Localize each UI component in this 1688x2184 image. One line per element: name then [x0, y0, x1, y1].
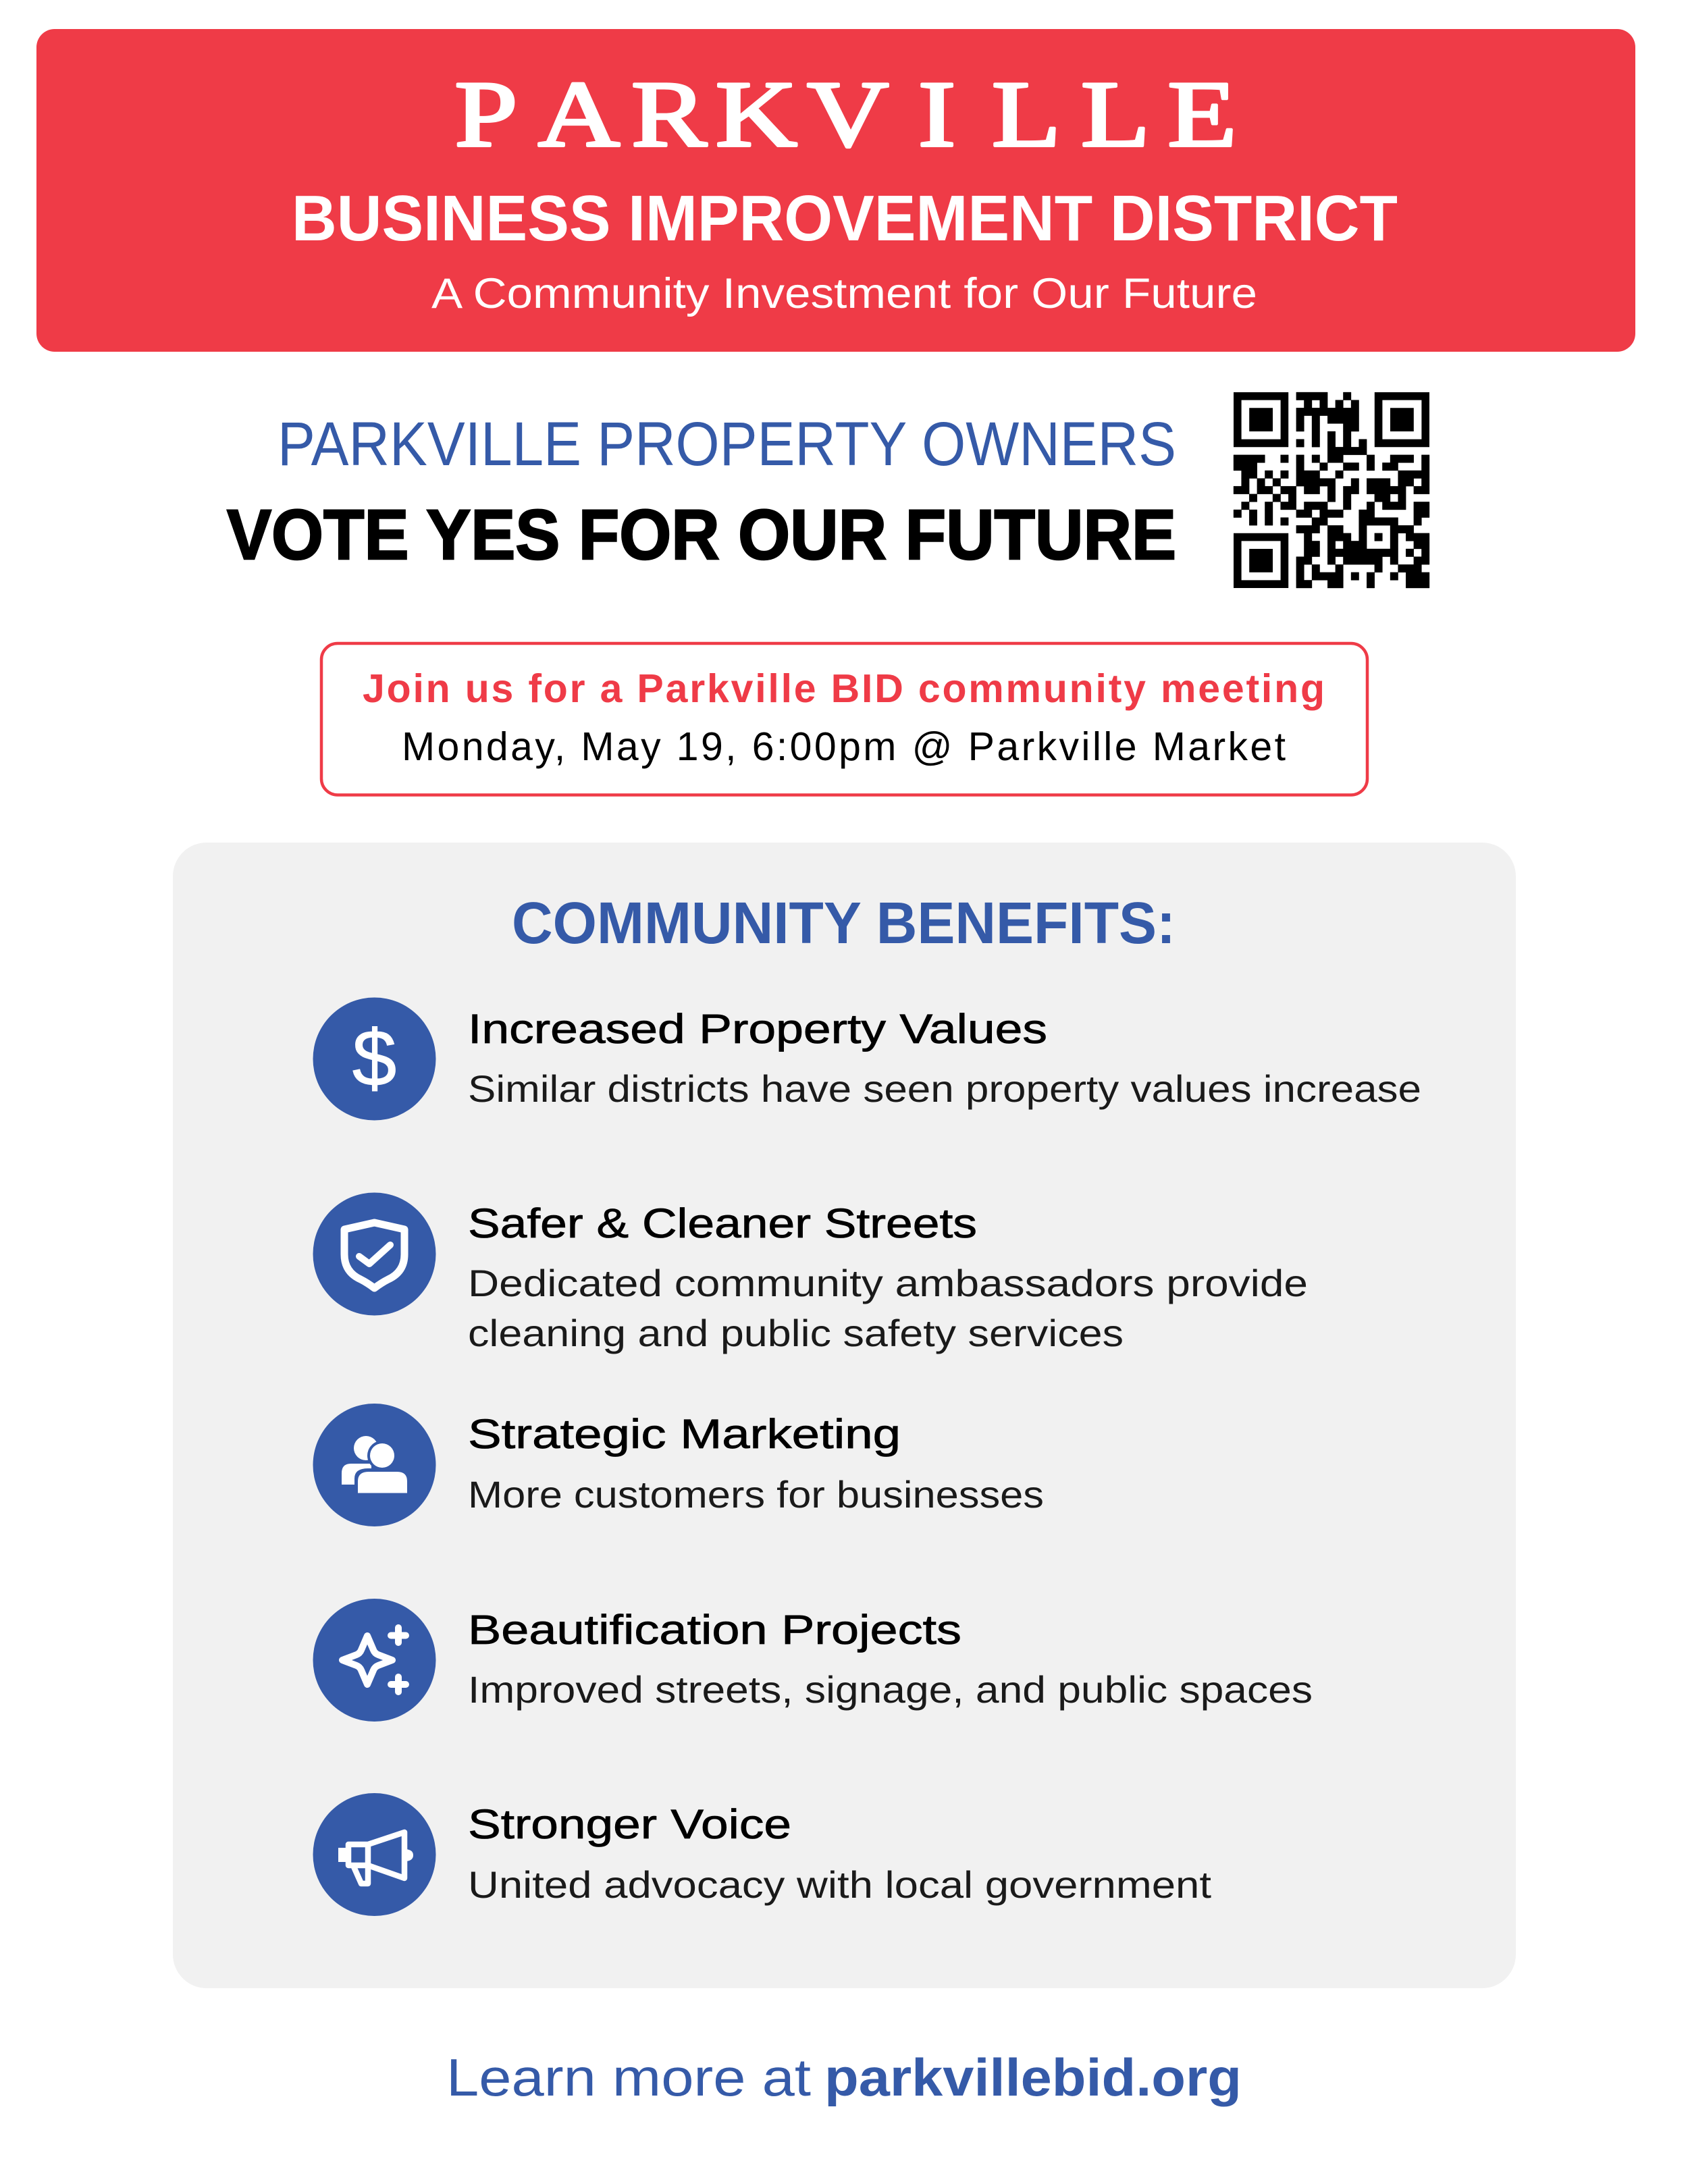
meeting date and place: Monday, May 19, 6:00pm @ Parkville Market — [402, 724, 1286, 769]
icon: dollar sign — [313, 998, 436, 1121]
QR code — [1234, 392, 1429, 588]
footer link — [446, 2048, 1242, 2107]
icon: dollar sign: $ — [352, 1014, 396, 1103]
benefit: safer streets — [313, 1192, 1308, 1354]
benefit: property values — [313, 998, 1421, 1121]
tagline: A Community Investment for Our Future — [431, 270, 1257, 317]
call to action headings — [227, 410, 1176, 575]
benefit: marketing — [313, 1404, 1044, 1526]
benefit description — [468, 1262, 1308, 1354]
benefit description: Improved streets, signage, and public spaces — [468, 1668, 1313, 1711]
footer link: Learn more at — [446, 2048, 811, 2107]
heading: community benefits: COMMUNITY BENEFITS: — [512, 890, 1176, 956]
heading: Business Improvement District: BUSINESS IMPROVEMENT DISTRICT — [292, 182, 1398, 255]
heading: vote yes: VOTE YES FOR OUR FUTURE — [227, 496, 1176, 575]
benefit description: More customers for businesses — [468, 1473, 1044, 1516]
benefit description: Similar districts have seen property values increase — [468, 1067, 1421, 1110]
benefit description: United advocacy with local government — [468, 1863, 1211, 1906]
meeting callout — [321, 643, 1367, 795]
benefit: beautification — [313, 1599, 1313, 1722]
icon: people — [313, 1404, 436, 1526]
icon: shield with check — [313, 1192, 436, 1315]
benefit title: Beautification Projects — [468, 1607, 961, 1653]
benefit description: cleaning and public safety services — [468, 1312, 1124, 1354]
benefit title: Increased Property Values — [468, 1006, 1047, 1052]
title: Parkville: PARKVILLE — [454, 62, 1237, 167]
benefit title: Stronger Voice — [468, 1801, 791, 1847]
panel: community benefits — [173, 843, 1516, 1988]
benefit: stronger voice — [313, 1793, 1211, 1916]
footer link: parkvillebid.org — [824, 2048, 1242, 2107]
heading: property owners: PARKVILLE PROPERTY OWNERS — [278, 410, 1176, 479]
benefit title: Strategic Marketing — [468, 1411, 901, 1457]
icon: megaphone — [313, 1793, 436, 1916]
benefit title: Safer & Cleaner Streets — [468, 1200, 977, 1246]
header banner — [36, 29, 1635, 352]
icon: sparkles — [313, 1599, 436, 1722]
meeting invitation: Join us for a Parkville BID community meeting — [363, 666, 1325, 711]
benefit description: Dedicated community ambassadors provide — [468, 1262, 1308, 1304]
